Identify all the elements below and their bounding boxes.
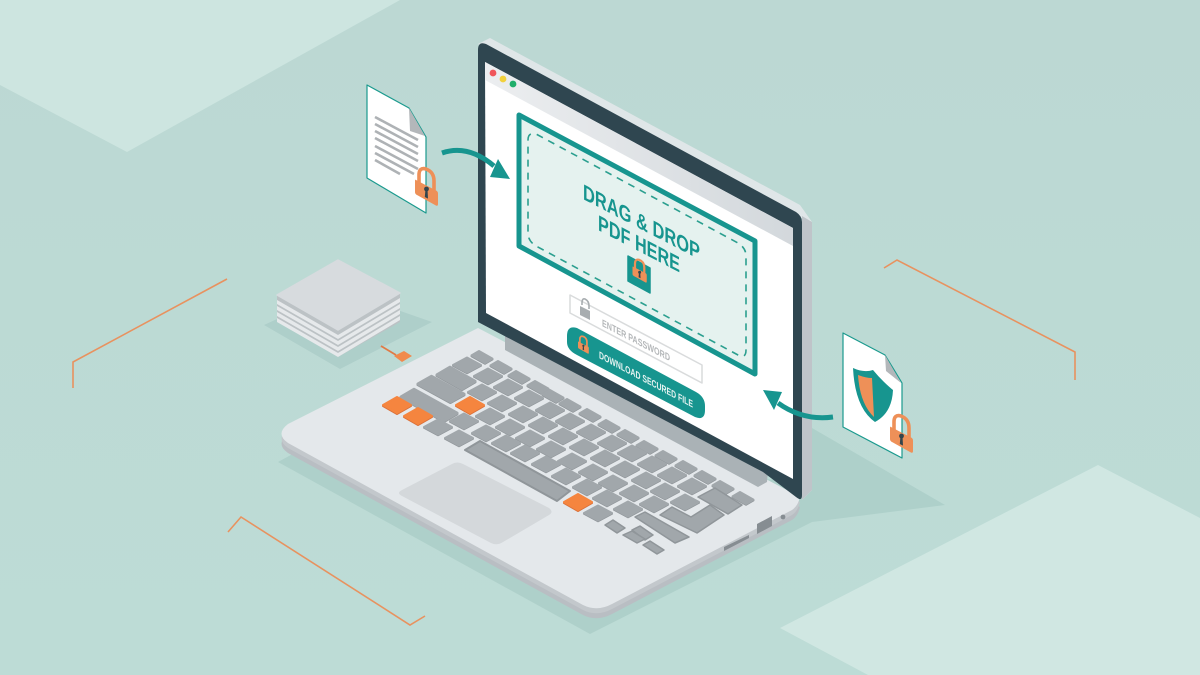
password field xyxy=(570,295,702,383)
laptop lid rim xyxy=(478,38,812,500)
hinge bar xyxy=(505,330,768,487)
orange accent keys xyxy=(383,397,592,511)
password placeholder: ENTER PASSWORD xyxy=(602,318,670,364)
document with shield xyxy=(843,333,913,458)
trackpad xyxy=(399,462,552,544)
document fold xyxy=(409,108,425,136)
orange corner bracket: right xyxy=(884,260,1075,380)
orange cable connector xyxy=(381,346,412,362)
background panel: top left xyxy=(0,0,400,152)
window control dots xyxy=(490,70,516,87)
background panel: bottom right xyxy=(780,465,1200,675)
laptop ground shadow xyxy=(278,428,945,634)
laptop bezel xyxy=(478,43,802,499)
laptop base xyxy=(282,328,800,618)
icon: button lock xyxy=(578,336,589,354)
drop zone heading line 1: DRAG & DROP xyxy=(583,179,700,265)
orange corner bracket: bottom xyxy=(228,517,425,625)
drop zone xyxy=(519,115,755,374)
browser title bar xyxy=(485,62,793,246)
arrow: out of screen xyxy=(763,390,833,418)
gray lock body xyxy=(580,306,590,320)
stack of paper xyxy=(264,260,432,369)
laptop ports xyxy=(724,515,785,551)
screen xyxy=(485,62,793,479)
button label: DOWNLOAD SECURED FILE xyxy=(599,350,693,411)
icon: gray lock xyxy=(582,299,589,309)
icon: shield xyxy=(853,368,893,422)
document with lock xyxy=(367,85,438,213)
dashed inner border xyxy=(528,134,746,356)
arrow: into dropzone xyxy=(442,150,510,179)
keyboard xyxy=(383,351,754,554)
orange corner bracket: left xyxy=(73,279,227,388)
icon: orange padlock xyxy=(415,169,438,206)
download button xyxy=(567,327,705,418)
document fold xyxy=(885,355,901,383)
drop zone heading line 2: PDF HERE xyxy=(598,210,680,277)
icon: drop zone lock xyxy=(628,256,650,293)
document text lines xyxy=(375,117,418,174)
icon: orange padlock xyxy=(890,416,913,453)
